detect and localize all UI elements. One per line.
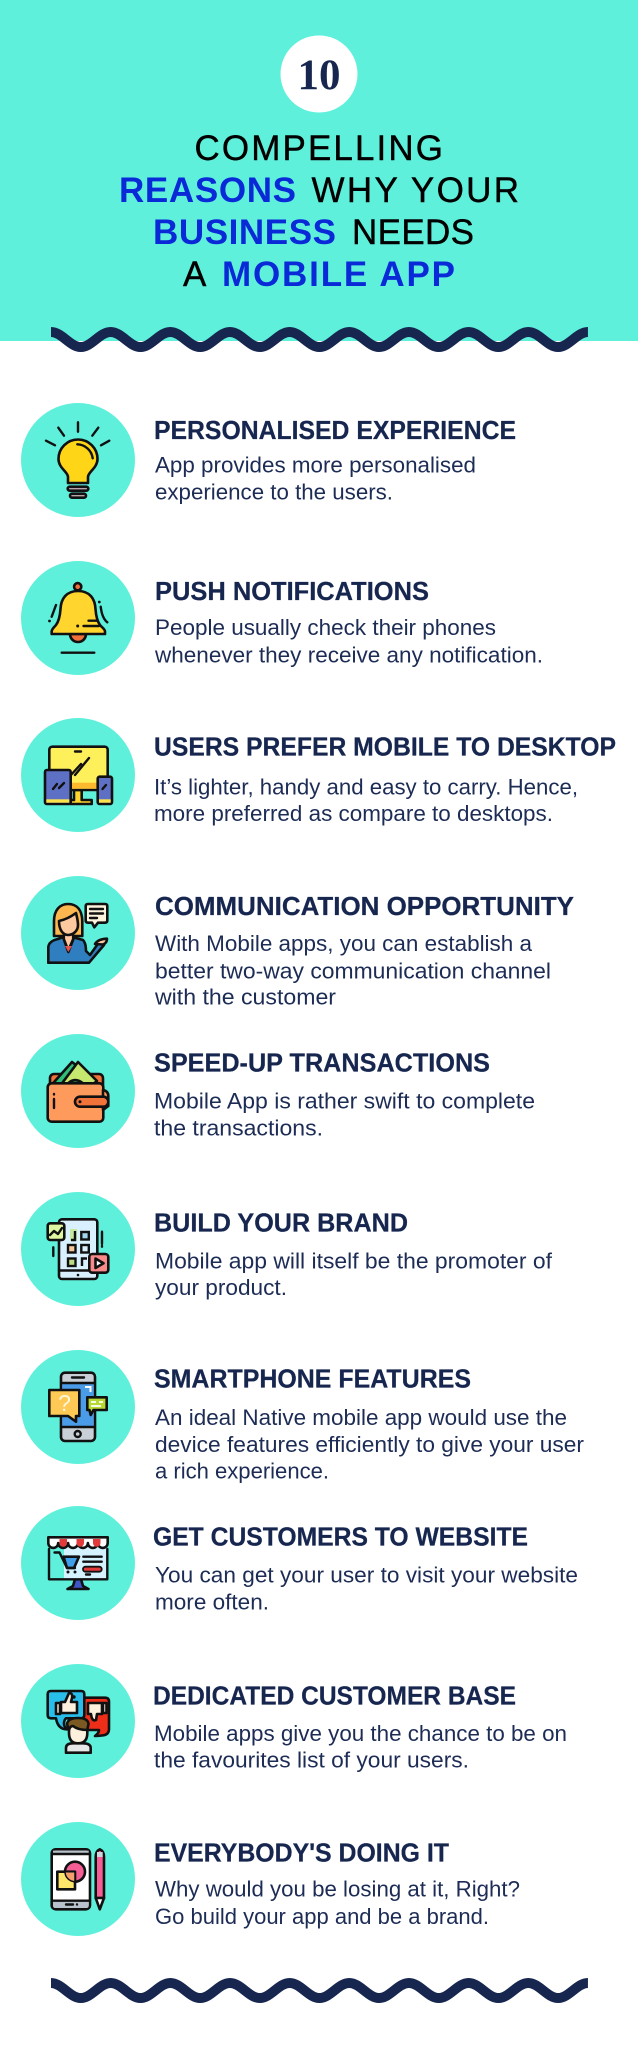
bottom wave divider — [51, 1983, 588, 1998]
description: It’s lighter, handy and easy to carry. Hence, — [154, 774, 578, 799]
heading: GET CUSTOMERS TO WEBSITE — [153, 1521, 528, 1551]
title: NEEDS — [352, 213, 474, 252]
description — [154, 615, 543, 667]
heading: BUILD YOUR BRAND — [154, 1207, 408, 1237]
description: experience to the users. — [155, 479, 393, 504]
description — [154, 1088, 535, 1140]
title: BUSINESS — [153, 213, 336, 252]
icon: smartphone with chat bubbles: ? — [58, 1390, 71, 1416]
description: device features efficiently to give your user — [155, 1432, 585, 1457]
description: better two-way communication channel — [155, 958, 551, 983]
description: the transactions. — [154, 1115, 323, 1140]
heading: COMMUNICATION OPPORTUNITY — [155, 891, 574, 921]
description — [154, 1721, 567, 1773]
description: With Mobile apps, you can establish a — [155, 931, 532, 956]
item 2: push notifications — [21, 561, 543, 675]
description: with the customer — [154, 984, 337, 1009]
icon: woman with speech bubble — [21, 876, 135, 990]
description: your product. — [155, 1275, 287, 1300]
description — [155, 1248, 553, 1300]
heading: PERSONALISED EXPERIENCE — [154, 415, 516, 445]
description: An ideal Native mobile app would use the — [155, 1405, 567, 1430]
description — [155, 1405, 585, 1483]
description: the favourites list of your users. — [154, 1748, 469, 1773]
heading: PUSH NOTIFICATIONS — [155, 576, 429, 606]
description: a rich experience. — [155, 1458, 329, 1483]
title: REASONS — [119, 171, 296, 210]
icon: customer with like and dislike bubbles — [21, 1664, 135, 1778]
icon: smartphone with chat bubbles — [21, 1350, 135, 1464]
icon: bell — [21, 561, 135, 675]
description — [155, 453, 476, 504]
heading: SMARTPHONE FEATURES — [154, 1363, 471, 1393]
description: You can get your user to visit your website — [155, 1562, 578, 1587]
item 1: personalised experience — [21, 403, 516, 517]
description: whenever they receive any notification. — [154, 642, 543, 667]
item 3: users prefer mobile to desktop — [21, 718, 616, 832]
description — [155, 1877, 520, 1929]
item 7: smartphone features — [21, 1350, 585, 1483]
title: A — [183, 255, 207, 294]
icon: phone with design shapes and pencil — [21, 1822, 135, 1936]
description: more often. — [155, 1589, 269, 1614]
title — [119, 129, 519, 294]
icon: devices — [21, 718, 135, 832]
title: MOBILE APP — [222, 255, 455, 294]
description — [154, 931, 551, 1009]
item 4: communication opportunity — [21, 876, 574, 1009]
icon: online store monitor — [21, 1506, 135, 1620]
item 10: everybody's doing it — [21, 1822, 520, 1936]
description: People usually check their phones — [155, 615, 496, 640]
description: Mobile app will itself be the promoter of — [155, 1248, 553, 1273]
description: Mobile apps give you the chance to be on — [154, 1721, 567, 1746]
icon: wallet with cash — [21, 1034, 135, 1148]
title: COMPELLING — [194, 129, 443, 168]
heading: USERS PREFER MOBILE TO DESKTOP — [154, 732, 616, 762]
number badge: 10 — [298, 52, 340, 99]
heading: EVERYBODY'S DOING IT — [154, 1837, 449, 1867]
icon: phone with app grid — [21, 1192, 135, 1306]
top wave divider — [51, 332, 588, 347]
number badge — [280, 36, 358, 112]
heading: DEDICATED CUSTOMER BASE — [153, 1681, 516, 1711]
item 8: get customers to website — [21, 1506, 578, 1620]
header panel — [0, 0, 638, 341]
description — [155, 1562, 578, 1614]
description: Mobile App is rather swift to complete — [154, 1088, 535, 1113]
heading: SPEED-UP TRANSACTIONS — [154, 1048, 490, 1078]
description: more preferred as compare to desktops. — [154, 801, 553, 826]
item 9: dedicated customer base — [21, 1664, 567, 1778]
item 5: speed-up transactions — [21, 1034, 535, 1148]
title: WHY YOUR — [312, 171, 519, 210]
description — [154, 774, 578, 826]
icon: light bulb — [21, 403, 135, 517]
item 6: build your brand — [21, 1192, 553, 1306]
description: Go build your app and be a brand. — [155, 1904, 489, 1929]
description: Why would you be losing at it, Right? — [155, 1877, 520, 1902]
description: App provides more personalised — [155, 453, 476, 478]
